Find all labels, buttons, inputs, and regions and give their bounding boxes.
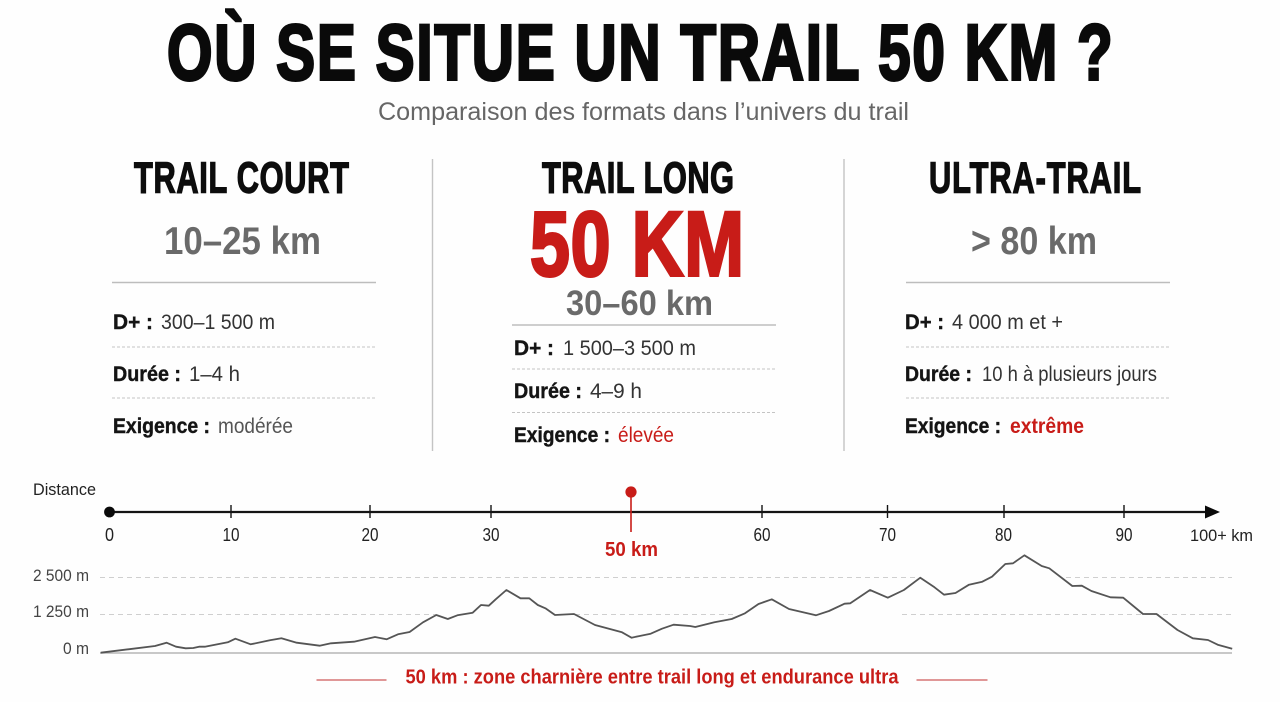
axis numbers [105, 525, 1253, 545]
axis numbers: 20 [362, 525, 378, 545]
marker: 50 km [605, 486, 658, 561]
elevation chart [33, 555, 1232, 658]
axis numbers: 60 [754, 525, 770, 545]
elevation labels: 0 m [63, 640, 89, 658]
axis arrowhead [1205, 506, 1220, 518]
elevation labels: 1 250 m [33, 603, 89, 621]
row: durée [905, 362, 1157, 386]
row: exigence: élevée [618, 423, 674, 447]
row: D+: 1 500–3 500 m [563, 336, 696, 360]
row: durée: Durée : [113, 362, 181, 386]
elevation labels [33, 567, 89, 658]
row: D+: 300–1 500 m [161, 310, 275, 334]
row: exigence: extrême [1010, 414, 1084, 438]
row: D+: D+ : [514, 336, 554, 360]
axis numbers: 10 [222, 525, 240, 545]
row: durée: 4–9 h [590, 379, 642, 403]
row: durée: Durée : [514, 379, 582, 403]
row: D+ [905, 310, 1063, 334]
title: OÙ SE SITUE UN TRAIL 50 KM ? [167, 8, 1113, 97]
row: exigence: modérée [218, 414, 293, 438]
axis line [109, 511, 1208, 513]
callout: 50 km : zone charnière entre trail long et endurance ultra [406, 666, 899, 688]
panel: trail court [112, 154, 376, 438]
row: exigence [113, 414, 293, 438]
highlight: 50 KM: 50 KM [530, 193, 744, 296]
axis ticks [231, 505, 1124, 518]
row: durée: 10 h à plusieurs jours [982, 362, 1157, 386]
row: exigence: Exigence : [113, 414, 210, 438]
heading: trail long: TRAIL LONG [542, 154, 734, 203]
range: > 80 km: > 80 km [971, 220, 1097, 263]
row: D+: 4 000 m et + [952, 310, 1063, 334]
elevation labels: 2 500 m [33, 567, 89, 585]
axis numbers: 80 [995, 525, 1012, 545]
row: exigence [905, 414, 1084, 438]
axis numbers: 30 [482, 525, 500, 545]
subtitle: Comparaison des formats dans l’univers du trail [378, 98, 909, 126]
axis origin [104, 507, 115, 517]
row: durée [113, 362, 240, 386]
row: D+ [113, 310, 275, 334]
axis numbers: 90 [1116, 525, 1132, 545]
row: D+: D+ : [113, 310, 153, 334]
heading: ultra-trail: ULTRA-TRAIL [929, 154, 1141, 203]
row: exigence: Exigence : [514, 423, 610, 447]
panel: trail long [512, 154, 776, 447]
row: exigence [514, 423, 674, 447]
row: durée [514, 379, 642, 403]
elevation profile [101, 555, 1232, 653]
axis numbers: 70 [879, 525, 896, 545]
row: durée: Durée : [905, 362, 972, 386]
row: exigence: Exigence : [905, 414, 1001, 438]
axis label: Distance [33, 480, 96, 499]
panel: ultra-trail [905, 154, 1170, 438]
range: 10-25 km: 10–25 km [164, 220, 321, 263]
axis numbers: 100+ km [1190, 526, 1253, 545]
row: D+: D+ : [905, 310, 944, 334]
row: durée: 1–4 h [189, 362, 240, 386]
distance axis [33, 480, 1253, 561]
row: D+ [514, 336, 696, 360]
marker: 50 km: 50 km [605, 539, 658, 561]
heading: trail court: TRAIL COURT [134, 154, 349, 203]
range: 30-60 km: 30–60 km [566, 283, 713, 323]
axis numbers: 0 [105, 525, 114, 545]
